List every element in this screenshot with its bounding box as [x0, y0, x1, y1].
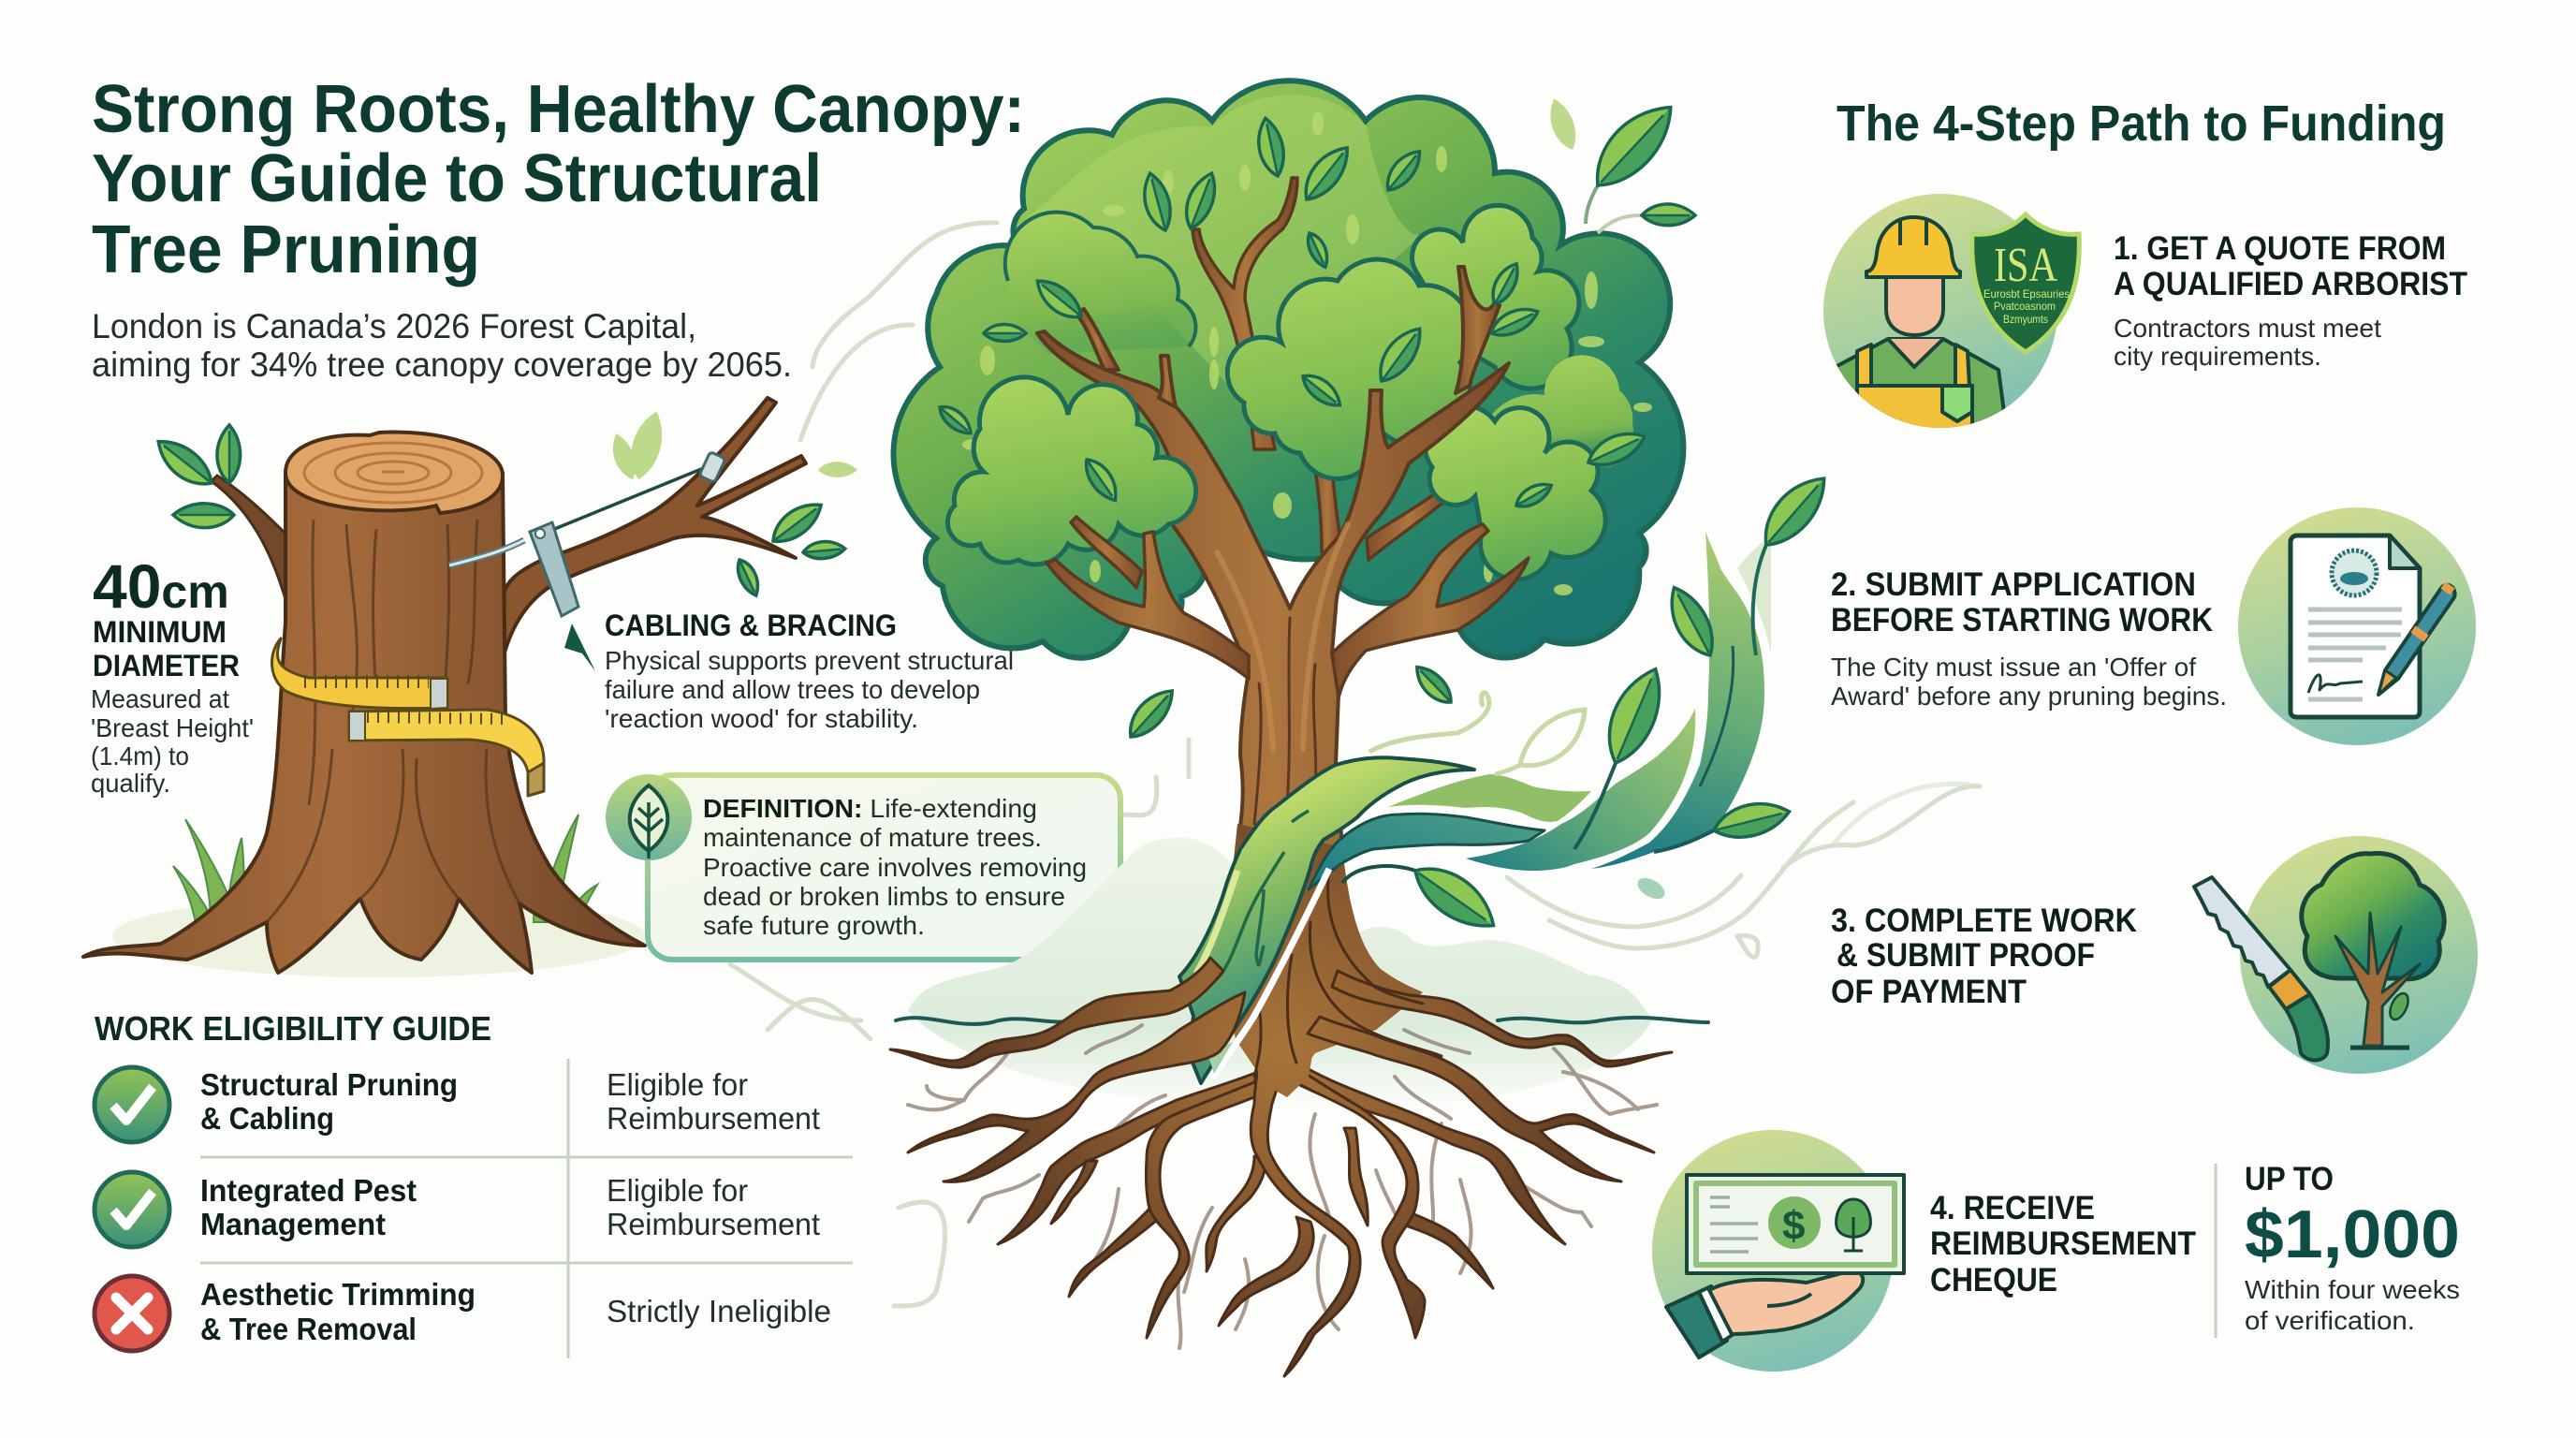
step 4 text: CHEQUE [1930, 1262, 2057, 1299]
row 1: structural pruning: Structural Pruning [200, 1067, 458, 1102]
definition text: dead or broken limbs to ensure [703, 882, 1065, 911]
heading: funding path: The 4-Step Path to Funding [1837, 95, 2446, 152]
floating leaves [1121, 92, 1837, 940]
step 2 text: 2. SUBMIT APPLICATION [1831, 566, 2196, 603]
icon: signed document and pen [2291, 536, 2455, 717]
icon: ISA shield: Bzmyumts [2003, 313, 2048, 326]
lower branches [1046, 517, 1529, 697]
step 4 text [1930, 1190, 2196, 1299]
small left branch [212, 476, 285, 599]
step 2 text: The City must issue an 'Offer of [1831, 653, 2196, 682]
front roots over ribbon [890, 958, 1245, 1181]
steel cable and bracket [449, 452, 725, 616]
step 3 [1831, 836, 2478, 1074]
row 2: integrated pest management: Management [200, 1207, 386, 1241]
row 2: integrated pest management: Reimbursement [607, 1207, 820, 1241]
stat: 40cm minimum diameter: Measured at [91, 684, 229, 713]
row 3: aesthetic trimming: Strictly Ineligible [607, 1294, 831, 1328]
step 2 [1831, 507, 2476, 745]
ground line [896, 1018, 1708, 1024]
step 3 text: & SUBMIT PROOF [1837, 937, 2095, 974]
icon: pruning saw [2194, 877, 2328, 1060]
step 1 text [2114, 230, 2467, 371]
stat: 40cm minimum diameter: (1.4m) to [91, 741, 189, 770]
stump rings [285, 432, 503, 513]
row 1: structural pruning: Eligible for [607, 1067, 748, 1102]
upper branches [1193, 178, 1451, 560]
step 1 [1823, 194, 2467, 440]
step 3 text: OF PAYMENT [1831, 974, 2027, 1010]
step 2 text: Award' before any pruning begins. [1831, 682, 2227, 711]
root junction fill [1254, 1039, 1315, 1097]
icon: ISA shield: Eurosbt Epsauries [1983, 287, 2070, 301]
step 1 text: 1. GET A QUOTE FROM [2114, 230, 2446, 267]
foliage clump: right upper [1488, 355, 1633, 468]
stat: 40cm minimum diameter: qualify. [91, 769, 170, 798]
background wisps [730, 223, 1980, 1306]
icon: arborist [1837, 215, 2005, 428]
cabling and bracing text [605, 609, 1014, 733]
intro text: aiming for 34% tree canopy coverage by 2065. [92, 345, 792, 384]
stat: 40cm minimum diameter [91, 551, 254, 798]
step 1 text: A QUALIFIED ARBORIST [2114, 266, 2467, 302]
stat: 40cm minimum diameter: 'Breast Height' [91, 713, 254, 742]
title [92, 72, 1025, 287]
canopy highlights [962, 95, 1652, 595]
icon: leaf [606, 774, 692, 860]
arrow pointer [564, 624, 595, 671]
icon: ISA shield: ISA [1994, 239, 2057, 292]
icon: cheque in hand: $ [1782, 1203, 1805, 1249]
reimbursement amount: UP TO [2245, 1161, 2334, 1197]
foliage clump: upper right [1412, 205, 1579, 389]
foliage clump: upper left outline [1005, 213, 1195, 346]
row 1: structural pruning: Reimbursement [607, 1101, 820, 1136]
step 3 text [1831, 902, 2137, 1010]
main roots [998, 824, 1672, 1376]
step 2 text [1831, 566, 2227, 711]
stat: 40cm minimum diameter: 40cm [93, 551, 229, 621]
root grain [1254, 871, 1442, 1077]
definition text: Proactive care involves removing [703, 853, 1087, 882]
intro text [92, 307, 792, 384]
row 2: integrated pest management [95, 1172, 820, 1247]
eligibility table: WORK ELIGIBILITY GUIDE [95, 1009, 491, 1048]
measuring tape [271, 638, 544, 796]
reimbursement amount: Within four weeks [2245, 1275, 2460, 1304]
reimbursement amount [2245, 1161, 2460, 1335]
stat: 40cm minimum diameter: MINIMUM [93, 615, 227, 649]
grass [173, 814, 597, 927]
icon: small tree [2302, 854, 2444, 1048]
title: Your Guide to Structural [92, 141, 822, 216]
reimbursement amount: of verification. [2245, 1306, 2415, 1335]
definition text: safe future growth. [703, 911, 925, 940]
title: Tree Pruning [92, 213, 480, 287]
step 1 text: city requirements. [2114, 342, 2321, 371]
green ribbon sweep [1179, 531, 1771, 1083]
foliage clump: lower left [947, 377, 1196, 565]
row 3: aesthetic trimming: & Tree Removal [200, 1312, 417, 1346]
icon: ISA shield: Pvatcoasnom [1994, 300, 2056, 313]
foliage clump: centre [1227, 259, 1471, 478]
eligibility table [95, 1009, 853, 1358]
definition text [703, 794, 1087, 940]
step 3 text: 3. COMPLETE WORK [1831, 902, 2137, 939]
foliage clump: upper left [1005, 213, 1195, 354]
step 2 text: BEFORE STARTING WORK [1831, 602, 2213, 638]
step 4 text: REIMBURSEMENT [1930, 1225, 2196, 1262]
main trunk and limbs [1037, 267, 1509, 847]
reimbursement amount: $1,000 [2245, 1197, 2460, 1272]
row 2: integrated pest management: Eligible for [607, 1173, 748, 1208]
icon: cheque in hand [1666, 1175, 1904, 1357]
row 3: aesthetic trimming [95, 1276, 831, 1351]
step 4 [1652, 1130, 2460, 1372]
root mass [1222, 824, 1423, 1091]
canopy [894, 81, 1683, 658]
cabling and bracing text: Physical supports prevent structural [605, 646, 1014, 675]
definition text: maintenance of mature trees. [703, 823, 1042, 852]
definition callout [606, 774, 1120, 960]
mist behind roots [908, 837, 1652, 1110]
row 2: integrated pest management: Integrated Pest [200, 1173, 417, 1208]
row 3: aesthetic trimming: Aesthetic Trimming [200, 1277, 476, 1312]
icon: ISA shield [1972, 214, 2079, 352]
bracing branch [498, 398, 806, 712]
step 1 text: Contractors must meet [2114, 314, 2381, 343]
canopy leaves [935, 116, 1649, 512]
step 4 text: 4. RECEIVE [1930, 1190, 2095, 1226]
fine secondary roots [908, 1025, 1657, 1348]
definition text: DEFINITION: Life-extending [703, 794, 1037, 823]
trunk [83, 473, 645, 973]
cabling and bracing text: 'reaction wood' for stability. [605, 704, 918, 733]
trunk bark lines [1217, 524, 1348, 824]
title: Strong Roots, Healthy Canopy: [92, 72, 1025, 147]
foliage clump: right lower [1425, 405, 1605, 580]
stat: 40cm minimum diameter: DIAMETER [93, 649, 240, 682]
cabling and bracing text: failure and allow trees to develop [605, 675, 980, 704]
illustration: central tree [890, 81, 1837, 1376]
row 1: structural pruning: & Cabling [200, 1101, 334, 1136]
intro text: London is Canada’s 2026 Forest Capital, [92, 307, 696, 345]
row 1: structural pruning [95, 1067, 820, 1142]
illustration: measured stump with cable brace [83, 398, 857, 977]
cabling and bracing text: CABLING & BRACING [605, 609, 897, 642]
